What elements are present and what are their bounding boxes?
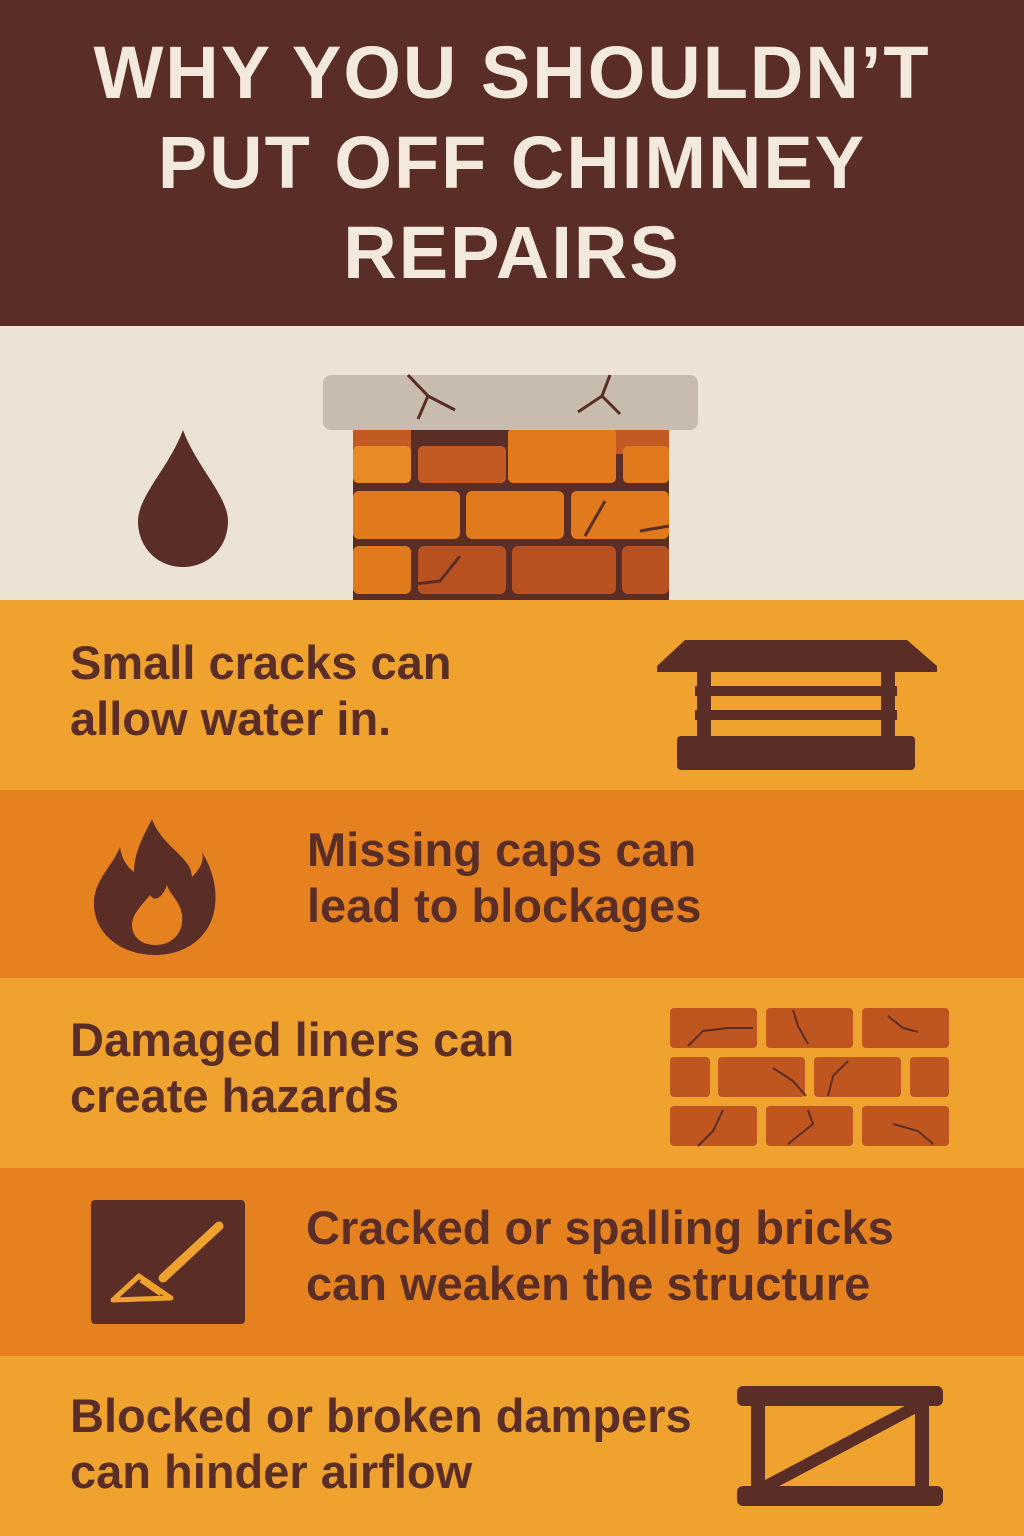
icon: damper — [737, 1386, 943, 1506]
header band — [0, 0, 1024, 326]
text: cracked bricks: can weaken the structure — [306, 1257, 870, 1310]
title: REPAIRS — [343, 211, 681, 294]
icon: chimney cap — [657, 640, 937, 770]
text: damaged liners: Damaged liners can — [70, 1013, 514, 1066]
band 1 — [0, 600, 1024, 790]
chimney illustration — [323, 374, 698, 600]
title: PUT OFF CHIMNEY — [158, 121, 866, 204]
text: blocked dampers: Blocked or broken dampers — [70, 1389, 692, 1442]
text: missing caps — [307, 823, 701, 932]
text: small cracks — [70, 636, 452, 745]
text: blocked dampers: can hinder airflow — [70, 1445, 472, 1498]
icon: trowel box — [91, 1200, 245, 1324]
text: blocked dampers — [70, 1389, 692, 1498]
icon: flame — [94, 819, 216, 955]
text: small cracks: allow water in. — [70, 692, 391, 745]
title: WHY YOU SHOULDN’T — [93, 31, 931, 114]
icon: water drop — [138, 430, 228, 567]
text: missing caps: lead to blockages — [307, 879, 701, 932]
text: cracked bricks: Cracked or spalling bricks — [306, 1201, 894, 1254]
band 2 — [0, 790, 1024, 978]
hero section — [0, 326, 1024, 600]
text: damaged liners — [70, 1013, 514, 1122]
title — [93, 31, 931, 294]
icon: cracked bricks — [670, 1008, 949, 1147]
band 5 — [0, 1356, 1024, 1536]
text: missing caps: Missing caps can — [307, 823, 696, 876]
text: small cracks: Small cracks can — [70, 636, 452, 689]
band 3 — [0, 978, 1024, 1168]
band 4 — [0, 1168, 1024, 1356]
text: damaged liners: create hazards — [70, 1069, 399, 1122]
text: cracked bricks — [306, 1201, 894, 1310]
